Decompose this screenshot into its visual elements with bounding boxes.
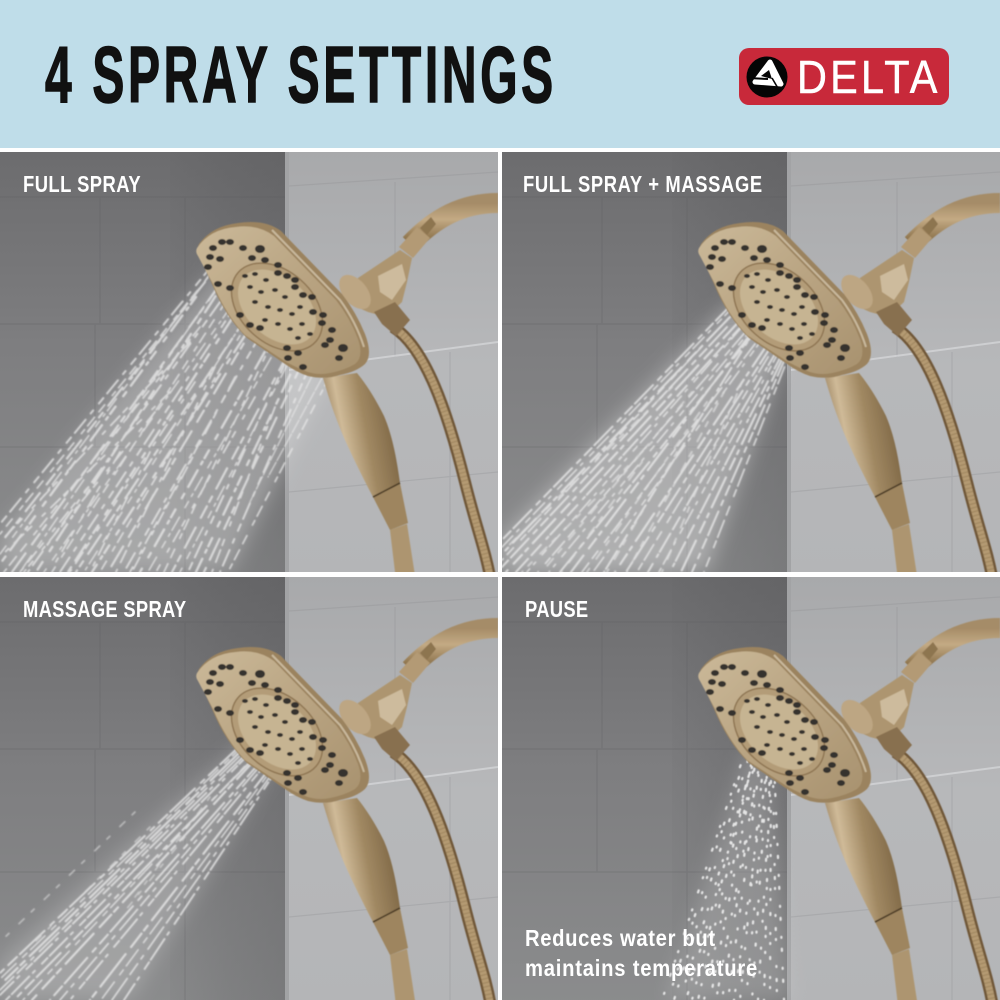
panel label: MASSAGE SPRAY xyxy=(23,597,186,623)
logo: Delta xyxy=(739,48,949,105)
spray: focused fan xyxy=(502,300,790,572)
panel label: PAUSE xyxy=(525,597,588,623)
spray: narrow jet xyxy=(0,740,284,1000)
caption xyxy=(525,925,757,981)
panel: pause xyxy=(502,577,1000,1000)
panel: full spray xyxy=(0,152,498,572)
title: 4 SPRAY SETTINGS xyxy=(45,29,553,119)
panel label: FULL SPRAY xyxy=(23,172,141,198)
panel: full spray + massage xyxy=(502,152,1000,572)
icon: Delta tri-lobe mark xyxy=(746,56,788,98)
panel label: FULL SPRAY + MASSAGE xyxy=(523,172,762,198)
header band xyxy=(0,0,1000,148)
caption: maintains temperature xyxy=(525,955,757,981)
spray: full wide fan xyxy=(0,262,330,572)
logo wordmark: DELTA xyxy=(797,52,938,104)
caption: Reduces water but xyxy=(525,925,715,951)
panel: massage spray xyxy=(0,577,498,1000)
spray: reduced droplets xyxy=(662,749,792,1000)
